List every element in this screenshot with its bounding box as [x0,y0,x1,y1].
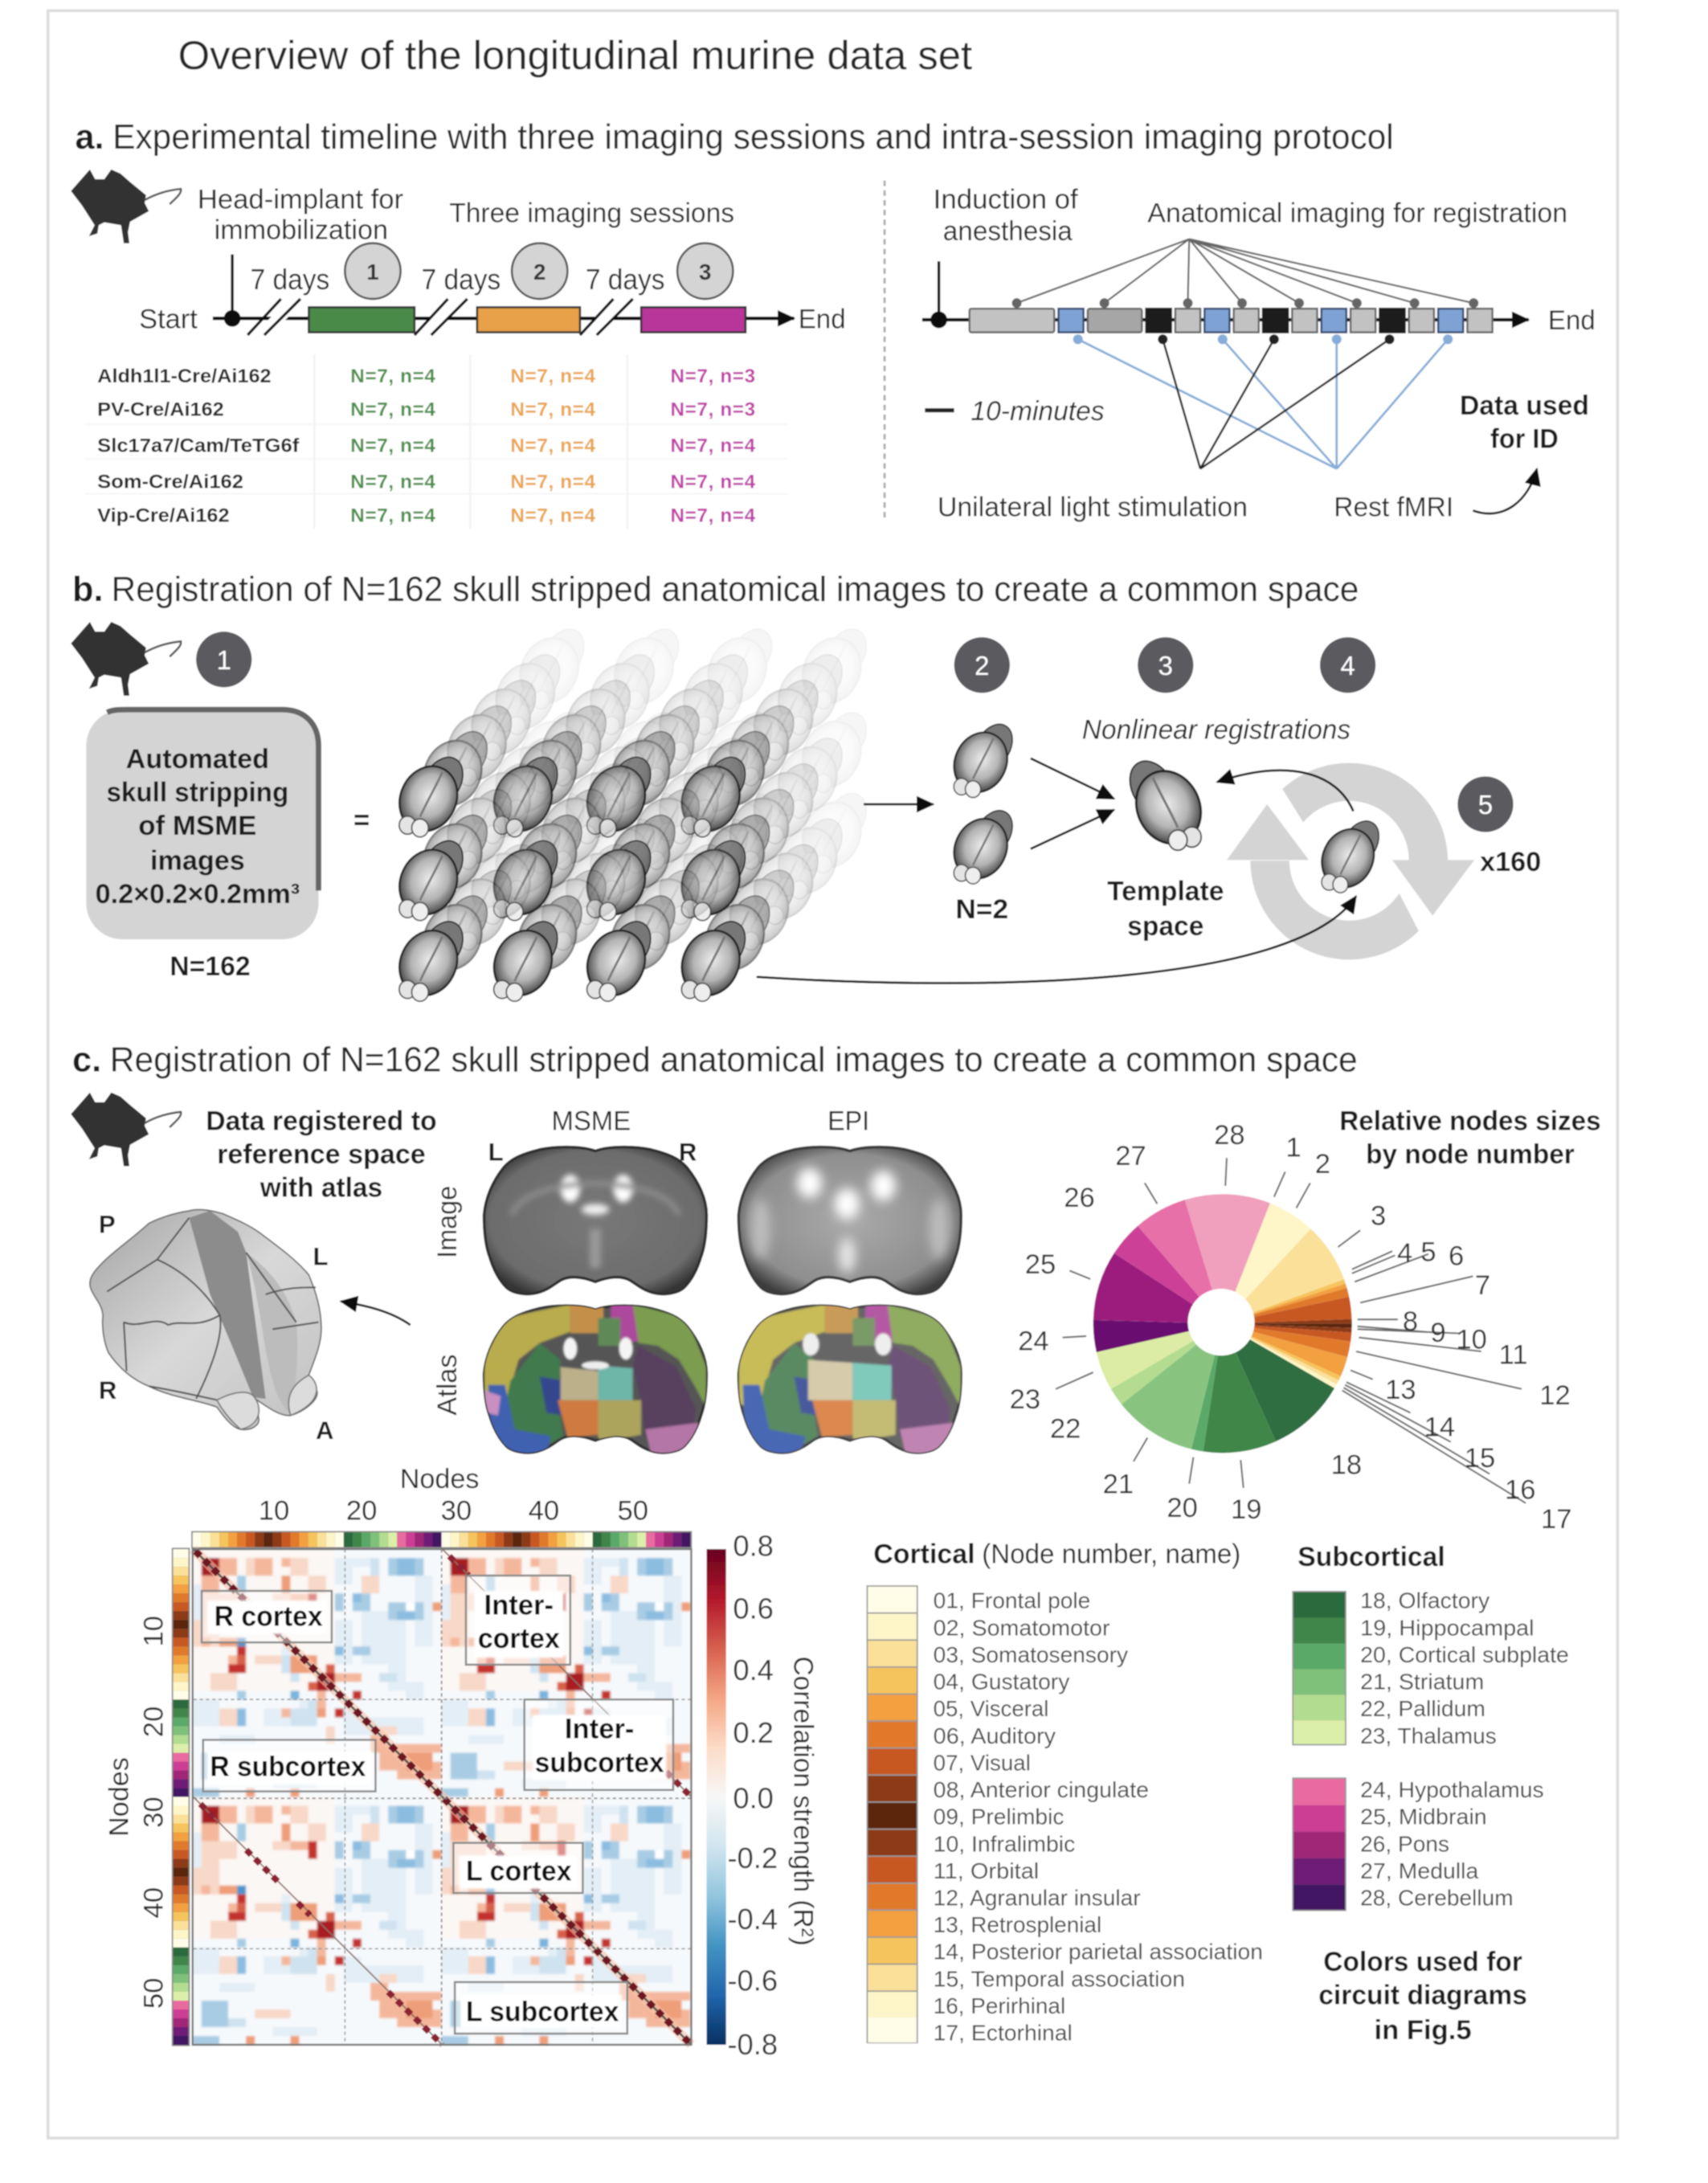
panel a: timeline and protocol [71,118,1596,529]
legend note: circuit diagrams [1318,1981,1527,2011]
heatmap axes: 10 [259,1496,289,1527]
protocol labels: Anatomical imaging for registration [1147,198,1567,229]
legend: cortical: 15, Temporal association [934,1966,1185,1991]
legend: subcortical: 26, Pons [1360,1831,1449,1856]
sample table: Vip-Cre/Ai162 [97,505,230,526]
orientation letters: L [313,1243,329,1271]
sample table: Aldh1l1-Cre/Ai162 [97,366,272,387]
EPI image [738,1147,961,1294]
protocol timeline blocks [922,239,1529,468]
colorbar: -0.8 [727,2028,778,2061]
timeline labels: 7 days [586,263,665,296]
orientation letters [99,1139,697,1445]
pie labels: 24 [1018,1326,1049,1356]
icon: mouse [71,1093,181,1167]
legend: cortical: 07, Visual [934,1750,1031,1775]
pie labels: 19 [1231,1494,1261,1525]
protocol labels: End [1548,305,1596,336]
sample table: N=7, n=4 [350,399,435,421]
pie labels: 3 [1371,1200,1386,1231]
legend: subcortical: 25, Midbrain [1360,1805,1487,1829]
timeline labels: End [799,304,846,334]
skull stripping box: images [150,845,245,876]
equals sign: = [353,805,370,836]
panel c: atlas and connectivity [71,1041,1601,2061]
timeline labels: 7 days [422,263,501,296]
pie labels: 28 [1214,1120,1245,1151]
Inter-subcortex label: subcortex [535,1746,664,1778]
heatmap axes: 10 [139,1616,170,1647]
sample table [85,354,787,529]
Inter-cortex label [466,1576,570,1665]
colorbar: 0.4 [733,1654,774,1686]
skull stripping box: of MSME [138,811,256,841]
heatmap axes [104,1464,648,2009]
legend: subcortical: 18, Olfactory [1360,1588,1489,1613]
pie labels: 17 [1541,1504,1572,1535]
N=162 label: N=162 [170,951,251,982]
session number badges [345,243,733,299]
L cortex label: L cortex [466,1854,572,1887]
matrix cells [193,1549,691,2045]
heatmap axes: 20 [346,1496,377,1527]
legend: cortical: 01, Frontal pole [934,1588,1090,1613]
legend note [1318,1947,1527,2046]
legend: cortical: 11, Orbital [934,1858,1039,1883]
Inter-cortex label: cortex [478,1622,560,1654]
legend: cortical [867,1539,1263,2046]
pie labels: 21 [1103,1470,1134,1500]
legend: cortical: (Node number, name) [982,1539,1240,1569]
sample table: N=7, n=4 [510,399,595,421]
image column headers: EPI [827,1106,869,1137]
heatmap axes: 50 [139,1978,170,2009]
timeline labels: Start [139,304,198,334]
legend: subcortical: 20, Cortical subplate [1360,1642,1569,1667]
pie labels: 1 [1285,1132,1301,1163]
skull stripping box: Automated [126,744,269,775]
pie labels: 11 [1499,1340,1528,1371]
atlas caption: reference space [217,1139,426,1170]
colorbar: 0.6 [733,1592,774,1625]
pie chart caption: by node number [1366,1139,1575,1170]
skull stripping box: 0.2×0.2×0.2mm³ [96,879,300,910]
pie labels: 7 [1475,1270,1490,1301]
pie chart of node sizes [1093,1194,1352,1453]
L subcortex label: L subcortex [466,1995,619,2027]
R subcortex label: R subcortex [210,1750,366,1783]
registration labels: N=2 [955,894,1008,925]
Inter-subcortex label [525,1699,673,1790]
pie labels [1010,1120,1572,1535]
sample table: N=7, n=4 [510,366,595,387]
pie labels: 10 [1456,1325,1487,1355]
sample table: N=7, n=4 [350,366,435,387]
colorbar: 0.8 [733,1530,774,1563]
pie labels: 6 [1449,1241,1464,1272]
heading a: Experimental timeline with three imaging sessions and intra-session imaging protocol [112,118,1394,157]
pie labels: 18 [1331,1449,1362,1480]
heatmap axes: 30 [441,1496,472,1527]
registration labels: space [1127,911,1203,942]
protocol labels: Rest fMRI [1334,492,1453,522]
sample table: N=7, n=4 [350,505,435,526]
node color bars [172,1531,692,2046]
timeline labels [139,184,846,334]
registration arrows [757,758,1356,983]
timeline labels: 7 days [251,263,329,296]
protocol labels: Unilateral light stimulation [938,492,1248,522]
heatmap axes: 30 [139,1797,170,1828]
legend: cortical: 17, Ectorhinal [934,2021,1073,2046]
sample table: N=7, n=4 [510,435,595,457]
legend: cortical: 02, Somatomotor [934,1615,1110,1640]
session number badges: 1 [366,260,379,284]
panel b: registration [71,570,1541,1005]
orientation letters: R [679,1139,697,1167]
MSME image [484,1147,706,1294]
pie labels: 25 [1025,1249,1056,1280]
heading c: c. [72,1041,101,1080]
timeline labels: Head-implant for [198,184,403,215]
legend: cortical: 16, Perirhinal [934,1993,1065,2018]
sample table: Som-Cre/Ai162 [97,472,243,493]
heatmap axes: 40 [139,1887,170,1918]
legend: cortical: 03, Somatosensory [934,1642,1128,1667]
sample table: N=7, n=4 [670,505,756,526]
orientation letters: R [99,1376,116,1404]
legend: cortical: 09, Prelimbic [934,1805,1064,1829]
legend: subcortical: Subcortical [1297,1542,1445,1572]
legend: subcortical [1292,1542,1569,1911]
legend: cortical: 04, Gustatory [934,1670,1069,1694]
legend: cortical: Cortical [873,1539,975,1569]
pie labels: 8 [1403,1306,1418,1337]
step badges: 4 [1340,651,1355,681]
heading a: a. [75,118,104,157]
atlas caption: with atlas [259,1173,382,1204]
pie chart caption [1339,1106,1601,1170]
L cortex label [453,1843,582,1893]
orientation letters: P [99,1211,116,1239]
arrow to 3D brain [341,1302,411,1325]
session number badges: 2 [533,260,545,284]
pie labels: 20 [1167,1493,1198,1523]
heatmap axes: 50 [617,1496,648,1527]
heatmap axes: 20 [139,1707,170,1737]
legend: cortical: 06, Auditory [934,1723,1056,1748]
sample table: N=7, n=4 [510,472,595,493]
EPI atlas overlay [738,1304,961,1454]
heatmap axes: Nodes [400,1464,479,1494]
image column headers: Atlas [432,1354,463,1416]
orientation letters: A [316,1416,334,1445]
registration labels: Template [1107,877,1224,907]
colorbar: Correlation strength (R²) [788,1656,819,1946]
pie leader lines [1056,1158,1526,1503]
skull stripping box: skull stripping [106,778,288,808]
image column headers: Image [432,1186,463,1258]
legend: subcortical: 24, Hypothalamus [1360,1777,1544,1802]
heatmap axes: 40 [529,1496,559,1527]
atlas caption: Data registered to [206,1106,437,1137]
session number badges: 3 [699,260,711,284]
legend note: Colors used for [1323,1947,1522,1977]
step badge 1: 1 [217,645,231,675]
legend: cortical: 14, Posterior parietal association [934,1940,1263,1964]
protocol labels: Induction of [934,184,1078,215]
colorbar: 0.0 [733,1781,774,1814]
pie labels: 4 [1397,1238,1412,1269]
legend: cortical: 12, Agranular insular [934,1885,1141,1910]
pie labels: 23 [1010,1384,1040,1415]
protocol labels: anesthesia [943,216,1073,247]
sample table: N=7, n=4 [510,505,595,526]
legend: subcortical: 22, Pallidum [1360,1696,1485,1721]
MSME atlas overlay [484,1304,706,1454]
legend: cortical: 13, Retrosplenial [934,1912,1101,1937]
registration labels: x160 [1480,847,1541,877]
legend note: in Fig.5 [1374,2015,1472,2046]
icon: mouse [71,622,181,696]
heatmap axes: Nodes [104,1757,134,1837]
pie labels: 5 [1420,1237,1436,1267]
pie labels: 9 [1431,1318,1446,1348]
pie labels: 16 [1505,1475,1536,1506]
atlas caption [206,1106,437,1204]
L subcortex label [455,1982,627,2034]
protocol labels [925,184,1596,522]
R cortex label [202,1591,332,1642]
registration labels: Nonlinear registrations [1082,715,1350,746]
sample table: N=7, n=4 [350,435,435,457]
heading b: b. [72,570,103,609]
sample table: N=7, n=3 [670,366,755,387]
callout: data used for ID: for ID [1490,423,1559,454]
pie labels: 14 [1424,1412,1455,1443]
Inter-subcortex label: Inter- [565,1713,634,1745]
step badges: 5 [1478,790,1493,820]
colorbar: 0.2 [733,1716,774,1749]
pie labels: 13 [1385,1375,1416,1405]
sample table: N=7, n=3 [670,399,755,421]
title: Overview of the longitudinal murine data set [178,33,972,78]
session timeline [213,255,795,335]
3D brain render [90,1210,321,1429]
skull stripping box [86,709,318,939]
step badges: 3 [1158,651,1173,681]
colorbar: -0.2 [727,1842,778,1874]
legend: subcortical: 21, Striatum [1360,1670,1484,1694]
callout: data used for ID [1460,390,1589,513]
sample table: Slc17a7/Cam/TeTG6f [97,435,300,457]
pie chart caption: Relative nodes sizes [1339,1106,1601,1137]
timeline labels: immobilization [215,215,388,246]
registration labels [955,715,1541,942]
R cortex label: R cortex [215,1600,323,1632]
heading c: Registration of N=162 skull stripped anatomical images to create a common space [110,1041,1358,1080]
R subcortex label [203,1739,375,1792]
heading b: Registration of N=162 skull stripped anatomical images to create a common space [112,570,1359,609]
pie labels: 26 [1064,1183,1095,1213]
image column headers: MSME [551,1106,631,1137]
colorbar [706,1530,819,2061]
sample table: N=7, n=4 [670,435,756,457]
protocol labels: 10-minutes [970,396,1105,427]
timeline labels: Three imaging sessions [449,198,734,229]
legend: cortical: 10, Infralimbic [934,1831,1075,1856]
correlation matrix heatmap [104,1464,819,2061]
legend: cortical: 08, Anterior cingulate [934,1777,1149,1802]
pie labels: 22 [1050,1413,1081,1444]
legend: subcortical: 28, Cerebellum [1360,1885,1514,1910]
brains: N=2, template, moving [945,717,1387,896]
sample table: N=7, n=4 [670,472,756,493]
legend: subcortical: 23, Thalamus [1360,1723,1497,1748]
step badges: 2 [975,651,989,681]
pie labels: 15 [1465,1443,1495,1474]
sample table: PV-Cre/Ai162 [97,399,224,421]
legend: subcortical: 27, Medulla [1360,1858,1479,1883]
brain image grid [389,622,875,1005]
step badges [954,637,1514,832]
icon: mouse [71,170,181,243]
orientation letters: L [488,1139,504,1167]
legend: subcortical: 19, Hippocampal [1360,1615,1534,1640]
sample table: N=7, n=4 [350,472,435,493]
legend: cortical: 05, Visceral [934,1696,1048,1721]
cycle arrows [1227,763,1474,959]
step badge 1 [196,632,251,687]
image column headers [432,1106,869,1416]
pie labels: 27 [1115,1141,1146,1171]
callout: data used for ID: Data used [1460,390,1589,421]
pie labels: 2 [1315,1149,1330,1179]
colorbar: -0.6 [727,1964,778,1997]
colorbar: -0.4 [727,1903,778,1936]
Inter-cortex label: Inter- [484,1588,554,1621]
pie labels: 12 [1539,1380,1571,1411]
